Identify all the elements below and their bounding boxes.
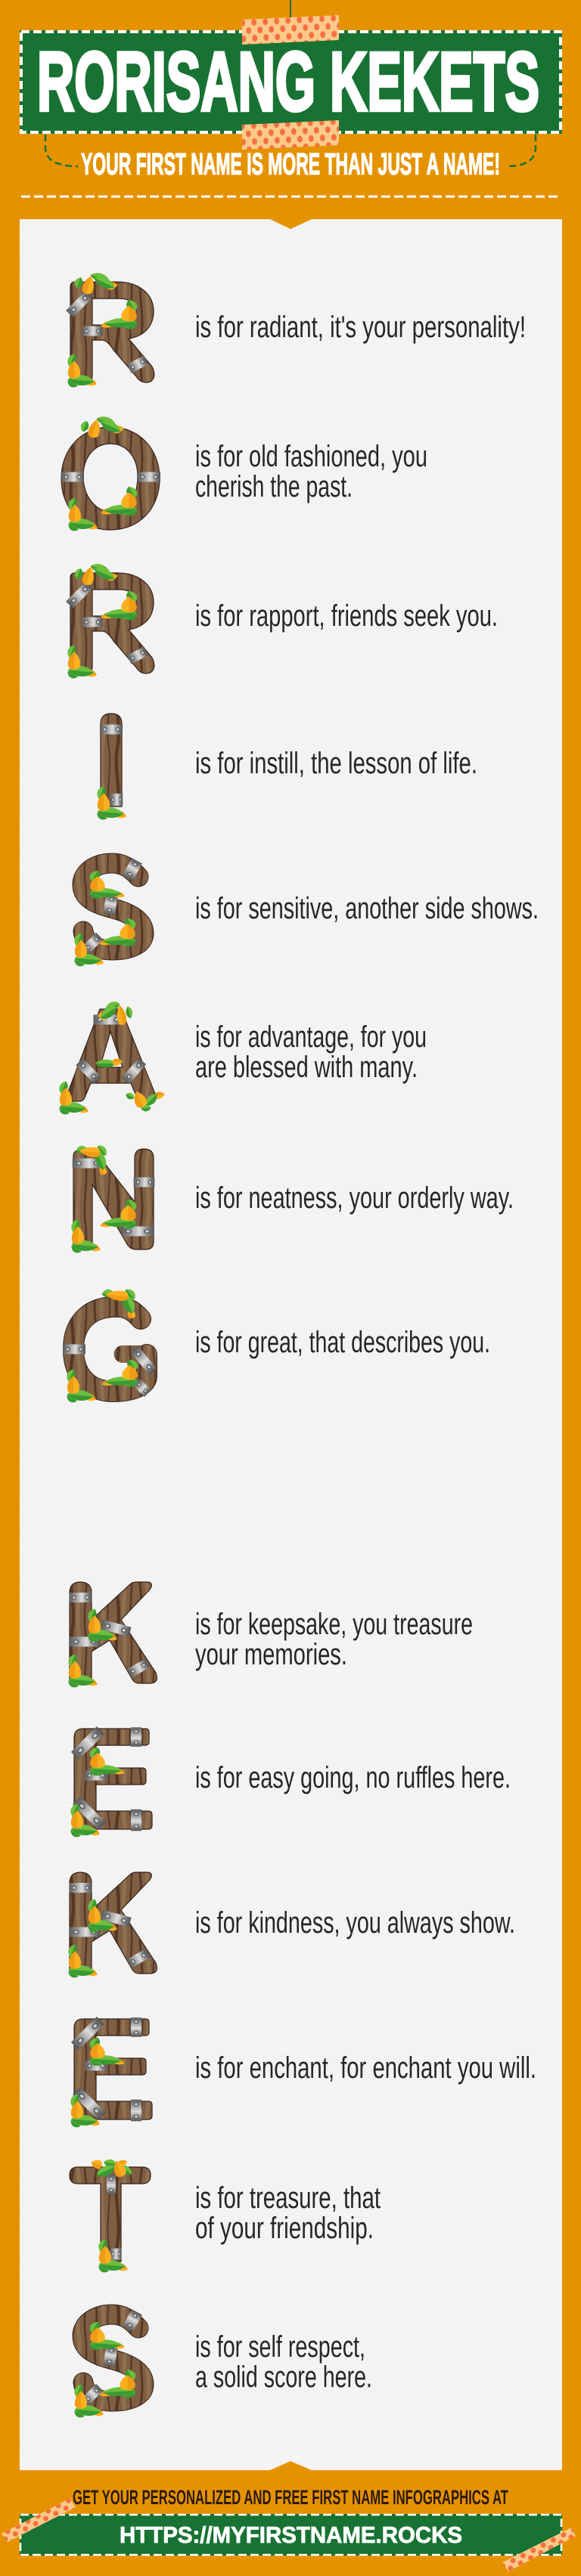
footer banner	[20, 2514, 562, 2556]
row O	[61, 414, 427, 533]
letter E	[69, 2017, 152, 2129]
row T: of your friendship.	[195, 2212, 374, 2245]
row G	[63, 1286, 490, 1404]
row A: are blessed with many.	[195, 1051, 418, 1084]
tape footer left	[2, 2498, 76, 2542]
text: is for keepsake, you treasure	[195, 1608, 473, 1641]
tape top	[242, 15, 339, 45]
row E second	[69, 2017, 536, 2129]
letter R	[66, 271, 154, 389]
footer url: HTTPS://MYFIRSTNAME.ROCKS	[120, 2522, 462, 2548]
letter K	[67, 1872, 157, 1980]
letter E	[69, 1726, 152, 1839]
text: is for treasure, that	[195, 2181, 381, 2215]
row O: cherish the past.	[195, 470, 353, 503]
row E	[69, 1726, 511, 1839]
text: is for instill, the lesson of life.	[195, 747, 477, 780]
title banner	[20, 15, 562, 150]
text: is for advantage, for you	[195, 1020, 427, 1054]
letter I	[95, 714, 127, 822]
letter T	[70, 2158, 151, 2274]
letter A	[57, 999, 166, 1116]
text: is for old fashioned, you	[195, 440, 427, 473]
letter S	[73, 858, 144, 968]
letter G	[63, 1286, 157, 1404]
letter O	[61, 414, 160, 533]
row R second	[66, 562, 498, 680]
row A	[57, 999, 427, 1116]
text: is for self respect,	[195, 2330, 365, 2364]
hanging line	[290, 0, 291, 18]
row S second: a solid score here.	[195, 2361, 372, 2394]
row I	[95, 714, 477, 822]
dashed divider	[21, 195, 559, 198]
row N	[70, 1143, 514, 1255]
row S	[73, 858, 539, 968]
row K: your memories.	[195, 1638, 347, 1671]
row R	[66, 271, 526, 389]
row S second	[73, 2309, 372, 2420]
row K	[67, 1582, 473, 1689]
tape footer right	[502, 2528, 576, 2571]
letter N	[70, 1143, 154, 1255]
letter S	[73, 2309, 144, 2420]
dashed bracket left	[45, 135, 78, 166]
dashed bracket right	[506, 135, 536, 166]
row T	[70, 2158, 381, 2274]
row K second	[67, 1872, 515, 1980]
tape bottom	[242, 120, 339, 150]
letter K	[67, 1582, 157, 1689]
letter R	[66, 562, 154, 680]
